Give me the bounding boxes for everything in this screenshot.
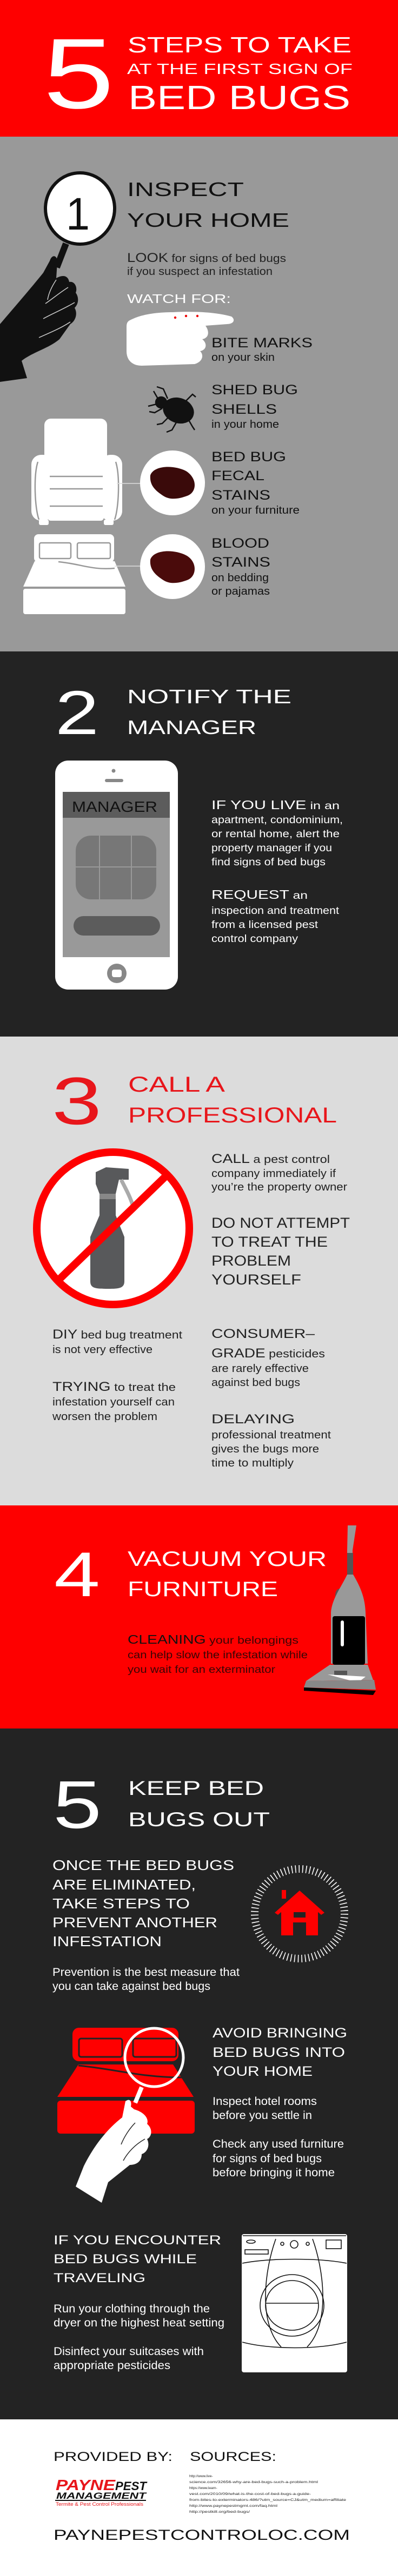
text: request: from a licensed pest <box>211 919 319 931</box>
text: prevention <box>52 1966 240 1993</box>
panel: step 4 vacuum <box>0 1505 398 1728</box>
text: consumer-grade <box>211 1327 325 1389</box>
icon: phone <box>55 761 178 990</box>
text: check used furniture: Check any used furniture <box>213 2138 344 2150</box>
heading: keep bed bugs out: BUGS OUT <box>128 1808 270 1831</box>
text: if you live: apartment, condominium, <box>211 815 343 826</box>
text: delaying: gives the bugs more <box>211 1443 319 1455</box>
text: source list: from-bites-to-exterminators-486/?utm_source=CJ&utm_medium=affiliate <box>189 2498 347 2502</box>
text: request: inspection and treatment <box>211 905 340 917</box>
heading: vacuum your furniture: VACUUM YOUR <box>128 1548 327 1571</box>
heading: keep bed bugs out: KEEP BED <box>128 1777 264 1799</box>
text: delaying: time to multiply <box>211 1457 294 1469</box>
text: source list: https://www.learn- <box>189 2486 217 2490</box>
text: delaying: professional treatment <box>211 1429 331 1441</box>
text: call pest control: CALL a pest control <box>211 1152 330 1166</box>
text: cleaning: can help slow the infestation while <box>128 1650 308 1661</box>
text: once eliminated: PREVENT ANOTHER <box>52 1914 217 1931</box>
text: trying <box>52 1380 176 1423</box>
text: blood stains: BLOOD <box>211 536 269 551</box>
text: call pest control <box>211 1152 347 1193</box>
text: consumer-grade: GRADE pesticides <box>211 1346 325 1361</box>
text: check used furniture: before bringing it home <box>213 2167 335 2179</box>
header panel <box>0 0 398 137</box>
heading: notify the manager: NOTIFY THE <box>127 685 291 708</box>
text: do not attempt: YOURSELF <box>211 1272 301 1288</box>
text: consumer-grade: against bed bugs <box>211 1377 300 1389</box>
text: check used furniture: for signs of bed bugs <box>213 2153 322 2165</box>
heading: call a professional: CALL A <box>128 1073 225 1097</box>
text: inspect hotel rooms <box>213 2095 317 2122</box>
text: bite marks <box>211 335 313 364</box>
icon: bed <box>23 534 142 614</box>
heading: provided by: PROVIDED BY: <box>54 2450 173 2464</box>
icon: blood stain circle <box>140 534 205 599</box>
heading: inspect your home <box>127 178 289 231</box>
heading: sources: SOURCES: <box>190 2450 276 2464</box>
text: if you live: property manager if you <box>211 843 332 854</box>
text: trying: TRYING to treat the <box>52 1380 176 1394</box>
text: blood stains: or pajamas <box>211 586 270 597</box>
text: shed bug shells <box>211 382 298 431</box>
heading: inspect your home: YOUR HOME <box>127 209 289 231</box>
text: source list: http://www.live- <box>189 2474 213 2478</box>
text: source list: science.com/32656-why-are-bed-bugs-such-a-problem.html <box>189 2480 319 2484</box>
website url: PAYNEPESTCONTROLOC.COM <box>54 2527 350 2543</box>
heading: call a professional: PROFESSIONAL <box>128 1104 337 1127</box>
logo: payne pest management: MANAGEMENT <box>56 2491 147 2501</box>
text: avoid bringing: AVOID BRINGING <box>213 2026 347 2041</box>
text: traveling heading: TRAVELING <box>54 2271 145 2285</box>
text: if you live: find signs of bed bugs <box>211 857 326 868</box>
text: blood stains: on bedding <box>211 572 269 584</box>
text: delaying <box>211 1412 331 1469</box>
text: trying: worsen the problem <box>52 1411 157 1423</box>
panel: step 1 inspect <box>0 137 398 651</box>
logo: payne pest management: PEST <box>115 2479 148 2493</box>
text: source list: http://pestkill.org/bed-bugs/ <box>189 2510 250 2514</box>
heading: notify the manager: MANAGER <box>127 716 256 738</box>
text: shed bug shells: SHELLS <box>211 402 277 417</box>
text: check used furniture <box>213 2138 344 2179</box>
text: prevention: Prevention is the best measure that <box>52 1966 240 1979</box>
text: traveling tips: Run your clothing through the <box>54 2303 210 2315</box>
text: once eliminated: ARE ELIMINATED, <box>52 1876 196 1893</box>
number 2: 2 <box>55 678 99 748</box>
logo: payne pest management: Termite & Pest Control Professionals <box>56 2501 144 2507</box>
title text: AT THE FIRST SIGN OF <box>127 60 353 77</box>
heading: vacuum your furniture <box>128 1548 327 1601</box>
text: look: LOOK for signs of bed bugs <box>127 251 286 265</box>
text: inspect hotel rooms: Inspect hotel rooms <box>213 2095 317 2108</box>
icon: hand with magnifier: 1 <box>66 189 90 239</box>
text: cleaning: you wait for an exterminator <box>128 1664 276 1676</box>
text: request: control company <box>211 933 298 945</box>
icon: armchair <box>31 419 142 525</box>
heading: call a professional <box>128 1073 337 1127</box>
text: fecal stains: FECAL <box>211 468 264 483</box>
title text: BED BUGS <box>128 79 350 117</box>
text: once eliminated: TAKE STEPS TO <box>52 1895 190 1912</box>
text: fecal stains: on your furniture <box>211 505 300 516</box>
text: diy <box>52 1327 183 1356</box>
heading: vacuum your furniture: FURNITURE <box>128 1578 278 1601</box>
text: blood stains: STAINS <box>211 555 270 570</box>
text: avoid bringing: YOUR HOME <box>213 2064 313 2079</box>
text: blood stains <box>211 536 270 597</box>
text: do not attempt: TO TREAT THE <box>211 1234 328 1250</box>
text: request: REQUEST an <box>211 887 308 902</box>
text: call pest control: company immediately if <box>211 1168 336 1180</box>
text: once eliminated <box>52 1857 234 1949</box>
text: do not attempt <box>211 1215 350 1288</box>
text: cleaning <box>128 1632 308 1676</box>
icon: bed bug <box>148 387 197 432</box>
text: request <box>211 887 340 945</box>
title number 5: 5 <box>43 18 114 130</box>
logo: payne pest management: PAYNE <box>56 2477 116 2493</box>
text: do not attempt: DO NOT ATTEMPT <box>211 1215 350 1231</box>
text: bite marks: on your skin <box>211 352 275 364</box>
text: consumer-grade: are rarely effective <box>211 1363 309 1375</box>
text: once eliminated: ONCE THE BED BUGS <box>52 1857 234 1873</box>
panel: step 2 notify <box>0 651 398 1037</box>
text: traveling heading: IF YOU ENCOUNTER <box>54 2233 221 2248</box>
text: avoid bringing <box>213 2026 347 2079</box>
text: traveling tips: appropriate pesticides <box>54 2359 170 2372</box>
text: once eliminated: INFESTATION <box>52 1933 162 1949</box>
number 4: 4 <box>54 1539 100 1610</box>
heading: watch for: WATCH FOR: <box>127 292 231 306</box>
text: trying: infestation yourself can <box>52 1396 175 1408</box>
icon: fecal stain circle <box>140 450 205 515</box>
text: consumer-grade: CONSUMER– <box>211 1327 315 1341</box>
text: source list <box>189 2474 347 2514</box>
icon: red bed with magnifier hand <box>57 2028 195 2203</box>
text: delaying: DELAYING <box>211 1412 295 1427</box>
text: traveling tips <box>54 2303 224 2372</box>
icon: dryer <box>242 2234 347 2372</box>
number 3: 3 <box>52 1064 102 1139</box>
heading: inspect your home: INSPECT <box>127 178 244 200</box>
text: diy: is not very effective <box>52 1344 152 1356</box>
text: fecal stains: BED BUG <box>211 449 286 465</box>
title text: STEPS TO TAKE <box>128 32 351 57</box>
icon: hand with magnifier <box>0 173 115 382</box>
text: shed bug shells: in your home <box>211 419 279 431</box>
icon: phone: MANAGER <box>72 798 157 815</box>
text: traveling heading <box>54 2233 221 2285</box>
heading: keep bed bugs out <box>128 1777 270 1831</box>
icon: vacuum cleaner <box>304 1525 376 1695</box>
text: if you live: IF YOU LIVE in an <box>211 798 340 812</box>
panel: step 3 call a professional <box>0 1037 398 1505</box>
logo: payne pest management <box>55 2477 148 2507</box>
text: call pest control: you’re the property owner <box>211 1181 347 1193</box>
text: do not attempt: PROBLEM <box>211 1253 291 1269</box>
text: avoid bringing: BED BUGS INTO <box>213 2045 345 2060</box>
text: prevention: you can take against bed bugs <box>52 1980 210 1993</box>
text: if you live: or rental home, alert the <box>211 829 340 840</box>
text: shed bug shells: SHED BUG <box>211 382 298 398</box>
text: inspect hotel rooms: before you settle in <box>213 2109 312 2122</box>
heading: notify the manager <box>127 685 291 738</box>
text: traveling tips: Disinfect your suitcases with <box>54 2345 204 2358</box>
icon: no spray bottle <box>37 1152 189 1304</box>
number 5: 5 <box>53 1767 102 1842</box>
text: source list: vest.com/2010/09/what-is-the-cost-of-bed-bugs-a-guide- <box>189 2492 311 2496</box>
text: traveling tips: dryer on the highest heat setting <box>54 2317 224 2329</box>
text: look: if you suspect an infestation <box>127 266 273 278</box>
text: diy: DIY bed bug treatment <box>52 1327 183 1342</box>
text: bite marks: BITE MARKS <box>211 335 313 351</box>
text: fecal stains <box>211 449 300 516</box>
text: traveling heading: BED BUGS WHILE <box>54 2252 197 2266</box>
text: if you live <box>211 798 343 868</box>
footer panel <box>0 2419 398 2576</box>
text: source list: http://www.paynepestmgmt.com/faq.html <box>189 2504 278 2508</box>
text: fecal stains: STAINS <box>211 488 270 503</box>
panel: step 5 keep bed bugs out <box>0 1728 398 2419</box>
title text <box>127 32 353 117</box>
text: cleaning: CLEANING your belongings <box>128 1632 298 1646</box>
icon: house in tick ring <box>255 1869 344 1959</box>
text: look <box>127 251 286 278</box>
icon: pointing hand with bite marks <box>127 312 234 366</box>
